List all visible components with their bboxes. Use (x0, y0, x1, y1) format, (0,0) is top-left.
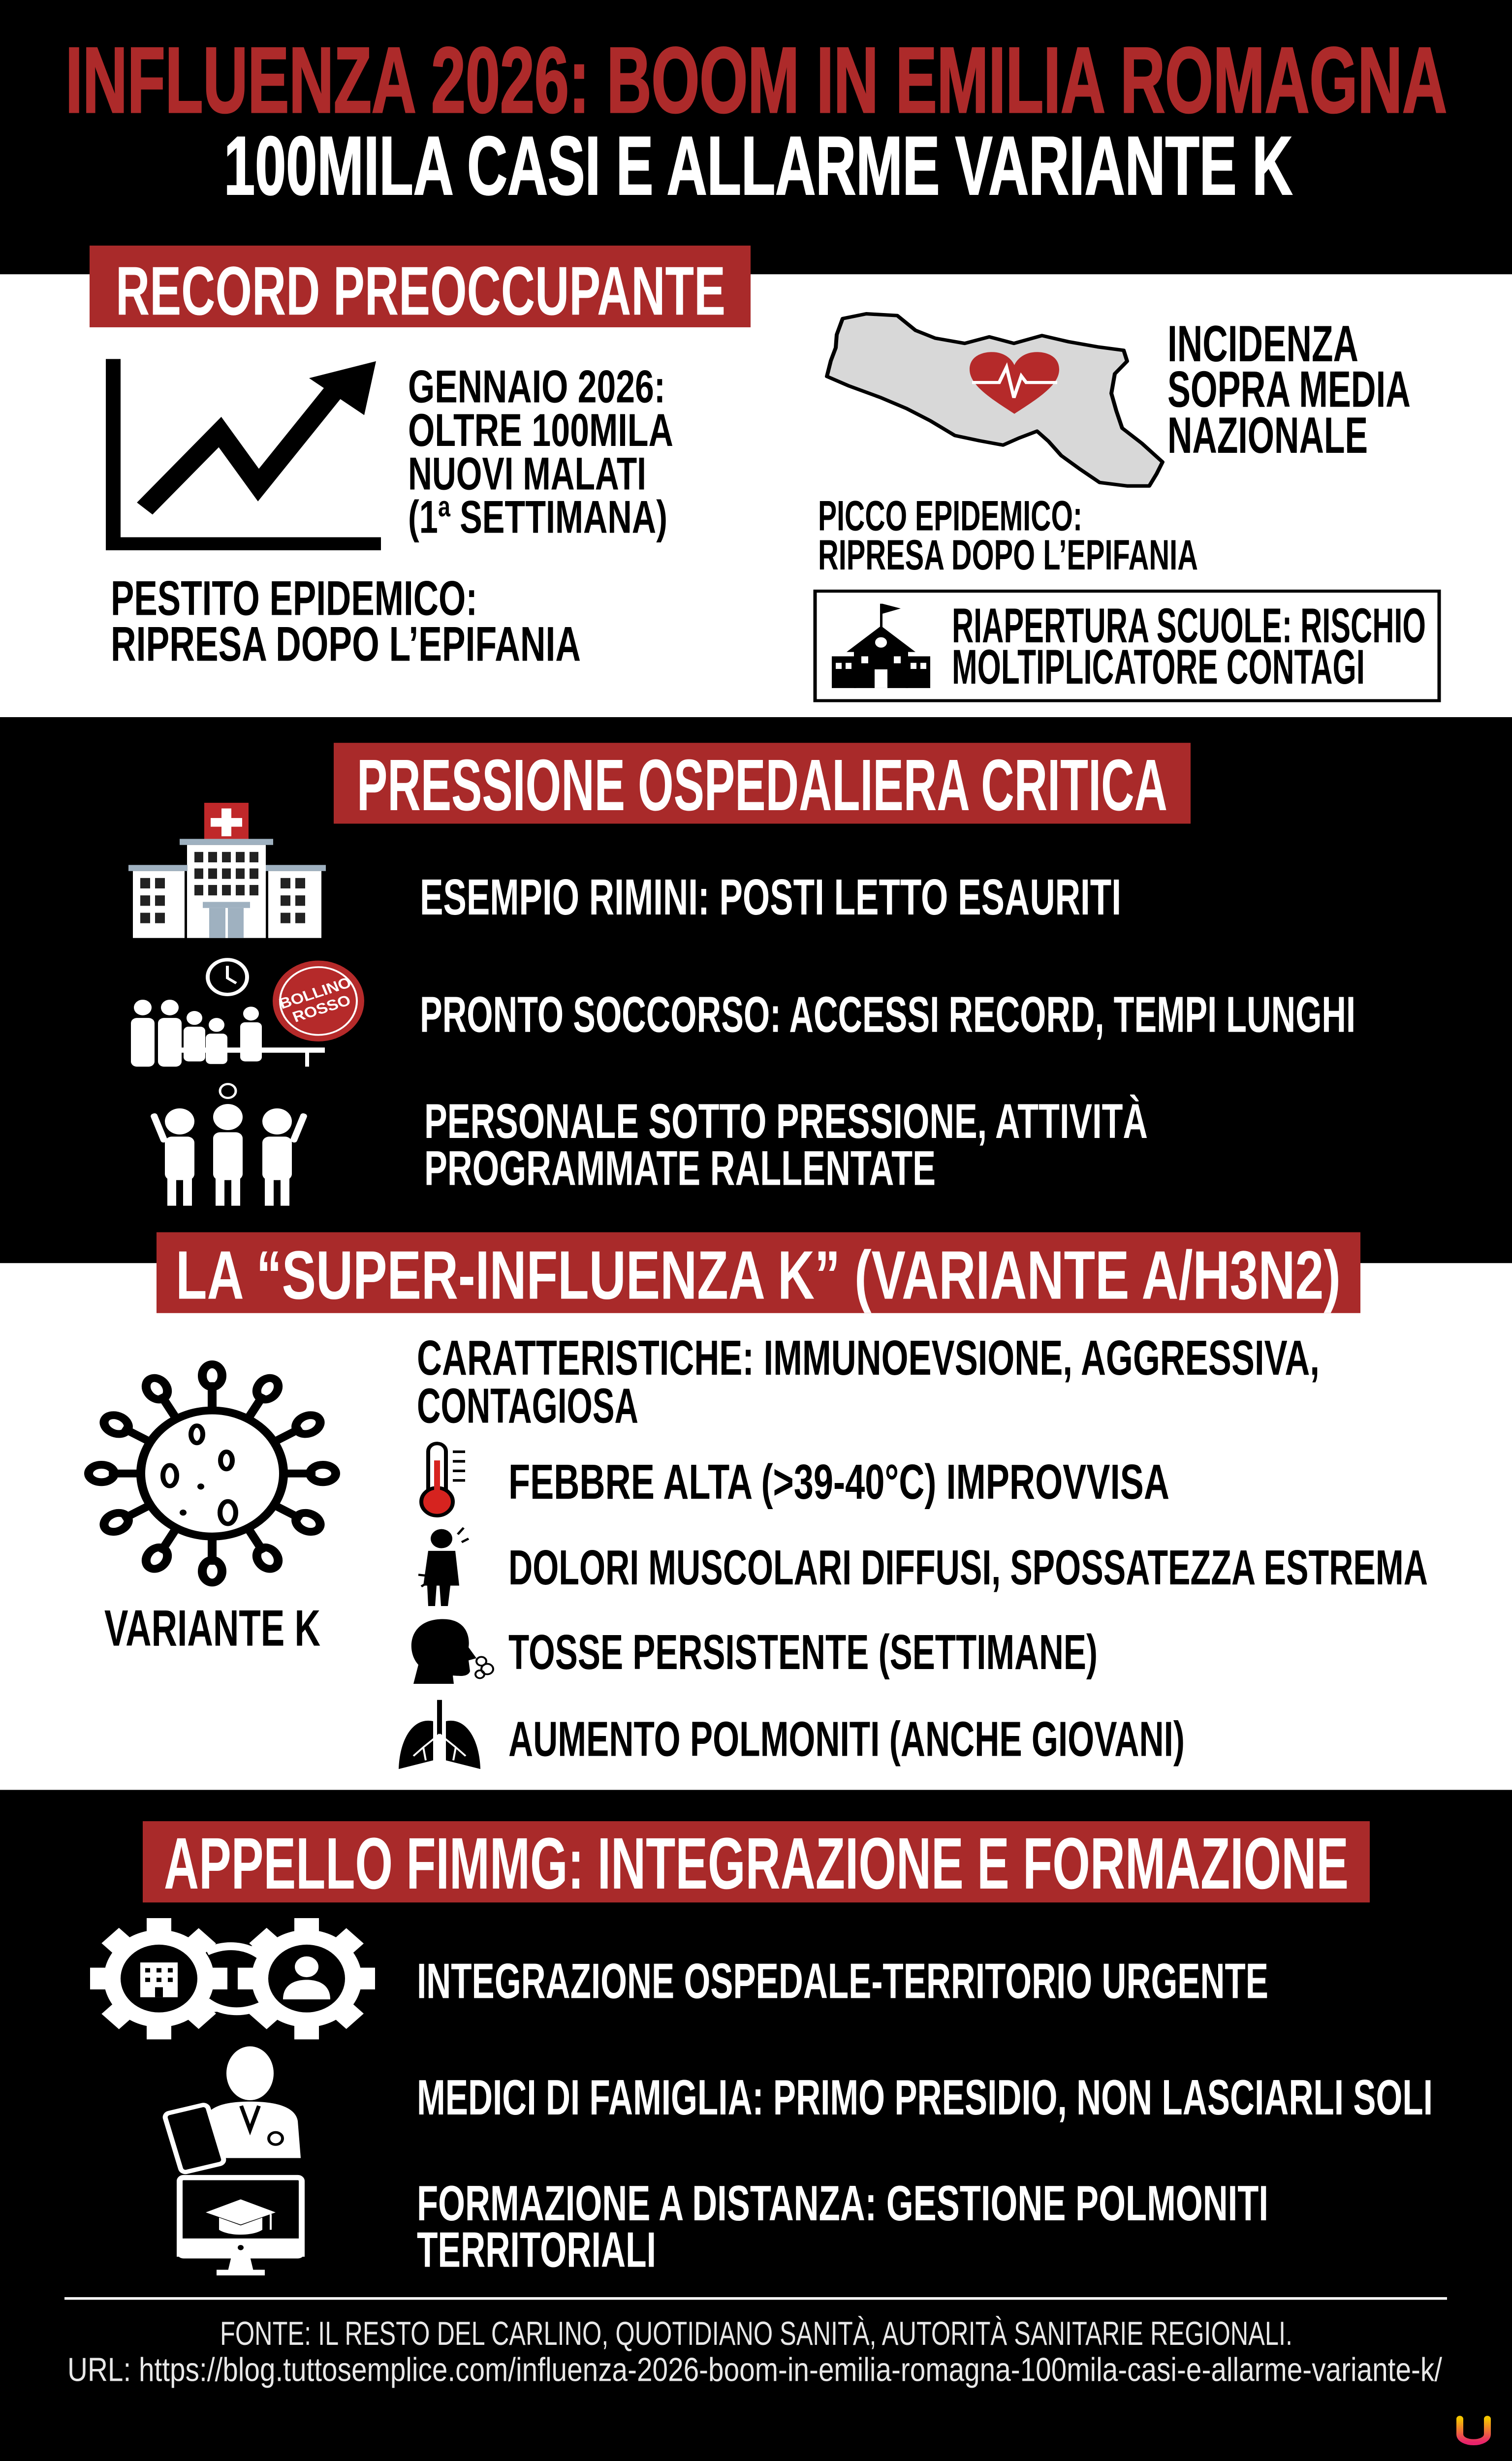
text: personale sotto pressione (424, 1094, 1148, 1196)
icon: logo (1460, 2419, 1487, 2442)
text: incidenza sopra media nazionale: INCIDENZA (1167, 315, 1358, 372)
text: variante k: VARIANTE K (104, 1599, 320, 1657)
section heading: record preoccupante: RECORD PREOCCUPANTE (116, 252, 725, 329)
icon: waiting room with bollino rosso: ROSSO (290, 992, 353, 1025)
icon: emilia romagna map with heart (827, 314, 1163, 486)
text: gennaio 2026 (408, 361, 673, 543)
text: picco epidemico left: PESTITO EPIDEMICO: (111, 571, 477, 626)
icon: virus (89, 1364, 336, 1582)
icon: school (832, 604, 930, 688)
text: incidenza sopra media nazionale (1167, 315, 1411, 464)
text: gennaio 2026: OLTRE 100MILA (408, 405, 673, 456)
icon: thermometer (421, 1444, 465, 1515)
icon: integration gears (90, 1918, 375, 2039)
text: personale sotto pressione: PROGRAMMATE RALLENTATE (424, 1141, 936, 1196)
icon: hospital (128, 803, 326, 938)
icon: lungs (399, 1700, 480, 1769)
text: gennaio 2026: GENNAIO 2026: (408, 361, 665, 412)
icon: waiting room with bollino rosso: BOLLINO (277, 974, 354, 1012)
text: picco epidemico right: PICCO EPIDEMICO: (818, 492, 1082, 539)
text: caratteristiche: CONTAGIOSA (417, 1378, 638, 1433)
icon: stressed staff (150, 1084, 308, 1206)
icon: coughing head (411, 1619, 493, 1684)
text: formazione a distanza: TERRITORIALI (417, 2222, 656, 2277)
text: incidenza sopra media nazionale: NAZIONALE (1167, 407, 1368, 464)
icon: monitor with graduation cap (177, 2177, 305, 2275)
footer: sources (67, 2315, 1443, 2388)
section heading: record preoccupante (90, 246, 751, 329)
text: gennaio 2026: NUOVI MALATI (408, 448, 646, 500)
icon: aching person (418, 1528, 469, 1606)
text: picco epidemico left (111, 571, 581, 671)
text: picco epidemico left: RIPRESA DOPO L’EPIFANIA (111, 616, 581, 671)
section heading: pressione ospedaliera (334, 743, 1191, 826)
backgrounds (0, 0, 1512, 274)
text: picco epidemico right: RIPRESA DOPO L’EPIFANIA (818, 531, 1198, 579)
callout: riapertura scuole (815, 591, 1439, 701)
icon: rising chart (113, 359, 381, 544)
text: tosse: TOSSE PERSISTENTE (SETTIMANE) (508, 1624, 1098, 1680)
text: picco epidemico right (818, 492, 1198, 579)
text: formazione a distanza (417, 2175, 1268, 2277)
icon: waiting room with bollino rosso (131, 960, 364, 1067)
icon: family doctor with tablet (164, 2047, 301, 2173)
text: caratteristiche (417, 1330, 1320, 1433)
text: gennaio 2026: (1ª SETTIMANA) (408, 491, 667, 543)
